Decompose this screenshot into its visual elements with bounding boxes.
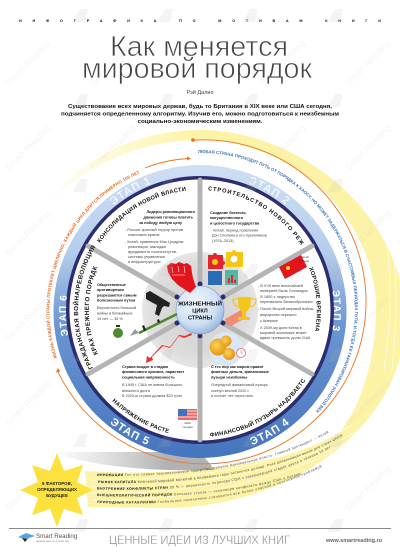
hub	[176, 286, 224, 334]
text: stage 6: Вероятность большой	[97, 306, 136, 310]
section headings: НАПРЯЖЕНИЕ РАСТЕТ	[112, 398, 170, 433]
watermark: Smart Reading	[343, 208, 393, 258]
text: stage 1: системы управления	[128, 255, 165, 259]
watermark: Smart Reading	[3, 208, 53, 258]
icon: red fist	[167, 262, 196, 293]
text: stage 2	[210, 211, 267, 243]
text: stage 4	[211, 365, 269, 398]
text: stage 2: могущественного	[210, 216, 244, 220]
section headings: ГРАЖДАНСКАЯ ВОЙНА/РЕВОЛЮЦИЯ,	[72, 245, 96, 370]
watermark: Smart Reading	[3, 293, 53, 343]
intro text: социально-экономическим изменениям.	[138, 119, 263, 125]
arc caption: orange: ЖИЗНЬ КАЖДОЙ СТРАНЫ ПРОТЕКАЕТ ЦИКЛИЧНО, КАЖДЫЙ ЦИКЛ ДЛИТСЯ ПРИМЕРНО 100 ЛЕТ	[46, 170, 139, 359]
text: stage 3: мировой экономике может	[260, 331, 307, 335]
watermark: Smart Reading	[343, 123, 393, 173]
icon: coins and clock	[209, 332, 246, 366]
star with factors title: 5 ФАКТОРОВ,	[42, 481, 72, 486]
author: Рэй Далио	[186, 89, 214, 96]
wheel	[54, 165, 346, 458]
text: stage 6: противоречия	[97, 288, 124, 292]
text: stage 6: войны в ближайшие	[97, 312, 133, 316]
icon: USA flag: сегодня	[182, 425, 193, 429]
watermark: Smart Reading	[258, 38, 308, 88]
outer blue ring	[54, 165, 346, 458]
title: мировой порядок	[82, 53, 312, 85]
text: stage 1: за победу любую цену	[139, 221, 183, 225]
text: stage 2: Создание богатого,	[210, 211, 247, 215]
text: stage 1: Лидеры революционного	[147, 210, 196, 214]
text: stage 2: - Китай: период правления	[211, 228, 258, 232]
text: stage 3: вдвое превысить долю США	[260, 336, 311, 340]
factors list: ВНЕШНЕПОЛИТИЧЕСКИЙ ПОРЯДОК Большая угроза — эскалация конфликта между США и Китаем	[97, 473, 301, 497]
text: stage 1: - Китай: правление Мао Цзэдуна:	[125, 240, 184, 244]
text: stage 5: социальная напряженность	[122, 376, 175, 380]
text: stage 4: Очередной финансовый пузырь	[211, 383, 268, 387]
footer url: www.smartreading.ru	[325, 538, 382, 544]
text: stage 5: финансового кризиса, нарастает	[122, 370, 184, 374]
text: stage 2: (1976–2013)	[212, 239, 234, 243]
watermark: Smart Reading	[3, 463, 53, 513]
text: stage 3: - К 2049-му доля Китая в	[258, 326, 302, 330]
stage labels: ЭТАП 2	[249, 177, 290, 204]
icon: trophy and hand	[225, 297, 256, 326]
top label: ИНФОГРАФИКА ПО МОТИВАМ КНИГИ	[19, 19, 381, 23]
text: stage 3: - В XVII веке величайшей	[258, 284, 303, 288]
stage labels	[59, 177, 341, 444]
intro text: подчиняется определенному алгоритму. Изучив его, можно подготовиться к неизбежным	[61, 110, 339, 118]
text: stage 6: Общественные	[97, 283, 126, 287]
text: stage 2: Дэн Сяопина и его преемников	[212, 234, 267, 238]
factors list	[97, 430, 342, 504]
watermark: Smart Reading	[258, 123, 308, 173]
section headings: ФИНАНСОВЫЙ ПУЗЫРЬ НАДУВАЕТСЯ	[210, 378, 305, 436]
text: stage 5: В 1945 г. США не имели большого	[122, 383, 182, 387]
stage labels: ЭТАП 3	[332, 290, 341, 331]
footer slogan: ЦЕННЫЕ ИДЕИ ИЗ ЛУЧШИХ КНИГ	[109, 533, 290, 547]
arc caption: blue: ЛЮБАЯ СТРАНА ПРОХОДИТ ПУТЬ ОТ ПОРЯДКА К ХАОСУ, НО МОЖЕТ ЗАДЕРЖАТЬСЯ В СЧАСТЛИВЫХ ПЕРИОДАХ ПУТИ, И ТОГДА ЕЕ ГАРАНТИРОВАН ЗОЛОТОЙ ВЕК	[198, 150, 358, 413]
footer	[9, 528, 391, 547]
title	[82, 31, 312, 85]
star with factors title: ОПРЕДЕЛЯЮЩИХ	[37, 487, 77, 492]
text: stage 1: классовых врагов	[128, 233, 159, 237]
text: stage 3: империей была Голландия	[260, 289, 308, 293]
text: stage 1: революция, закладка	[128, 245, 167, 249]
footer logo: Ценные идеи из лучших книг	[36, 540, 70, 543]
factors list: ВНУТРЕННИЕ КОНФЛИКТЫ СТРАН 30 % — вероятность перехода США к завершающей стадии цикла в течение 10 лет	[97, 446, 330, 490]
text: stage 5: В 2020-м страна должна $23 трлн	[122, 394, 182, 398]
text: stage 4: С тех пор как миром правят	[211, 365, 264, 369]
icon: China flag: Китай	[301, 255, 309, 259]
text: stage 5: внешнего долга	[122, 389, 151, 393]
hub: ЦИКЛ	[192, 308, 208, 314]
title: Как меняется	[110, 31, 288, 63]
text: stage 4: лопнул весной 2020 г.	[211, 389, 249, 393]
section headings: КОНСОЛИДАЦИЯ НОВОЙ ВЛАСТИ	[97, 186, 186, 243]
hub: ЖИЗНЕННЫЙ	[177, 300, 222, 308]
text: stage 3: к Америке	[260, 319, 278, 323]
text: stage 5	[122, 365, 184, 398]
star with factors title	[20, 453, 93, 527]
spokes	[88, 180, 312, 440]
footer logo: Smart Reading	[36, 533, 78, 540]
watermark: Smart Reading	[343, 378, 393, 428]
wheel shadow	[50, 452, 215, 470]
intro text	[61, 103, 339, 125]
text: stage 4: пузыри неизбежны	[211, 376, 247, 380]
footer logo	[18, 533, 78, 543]
text: stage 3: - После Второй мировой войны	[258, 307, 314, 311]
icon: USA flag	[178, 409, 197, 429]
hub: СТРАНЫ	[188, 316, 213, 322]
watermark: Smart Reading	[343, 463, 393, 513]
text: stage 4: и лопнет лет через пять	[211, 394, 253, 398]
hub joints	[174, 282, 226, 338]
yellow swoosh	[38, 130, 400, 508]
text: stage 3: - В 1800-х лидерство	[258, 295, 295, 299]
icon: rocket launcher	[130, 314, 177, 336]
watermark: Smart Reading	[343, 293, 393, 343]
text: stage 2: и целостного государства	[210, 222, 260, 226]
navy ring	[66, 176, 334, 444]
watermark: Smart Reading	[343, 38, 393, 88]
stage labels: ЭТАП 4	[250, 418, 289, 444]
text: stage 3: перехватила Великобритания	[260, 300, 313, 304]
stage labels: ЭТАП 1	[110, 178, 151, 204]
icon: USA flag: США	[184, 421, 191, 425]
intro text: Существование всех мировых держав, будь то Британия в XIX веке или США сегодня,	[68, 103, 332, 110]
section headings	[72, 186, 321, 436]
watermark: Smart Reading	[88, 38, 138, 88]
text: stage 3	[258, 284, 314, 340]
text: stage 1: движения готовы платить	[144, 216, 194, 220]
icon: falling red arrow	[146, 333, 192, 363]
section headings: СТРОИТЕЛЬСТВО НОВОГО РЕЖИМА	[208, 186, 304, 246]
text: stage 6: болезненным путем	[97, 298, 135, 302]
text: stage 4: фиатные деньги, финансовые	[211, 370, 269, 374]
icon: China flag: сегодня	[299, 259, 310, 263]
star with factors title: БУДУЩЕЕ	[46, 493, 68, 498]
text: stage 1: фундамента госинститутов,	[128, 250, 177, 254]
stage labels: ЭТАП 6	[59, 296, 68, 336]
text: stage 1	[125, 210, 196, 264]
stage labels: ЭТАП 5	[110, 418, 150, 444]
watermark: Smart Reading	[3, 123, 53, 173]
icon: puzzle pieces	[208, 250, 243, 285]
icon: pistol	[146, 291, 170, 316]
text: stage 6: 10 лет — 35 %	[97, 317, 123, 321]
text: stage 5: Страна входит в стадию	[122, 365, 169, 369]
grey inner disc	[142, 252, 258, 368]
icon: grenade	[113, 325, 123, 338]
text: stage 3: имущество перешло	[260, 313, 296, 317]
text: stage 1: и инфраструктуры	[128, 260, 161, 264]
text: stage 6	[97, 283, 137, 321]
white disc	[70, 180, 330, 440]
section headings: ХОРОШИЕ ВРЕМЕНА	[309, 266, 321, 331]
watermark: Smart Reading	[88, 123, 138, 173]
watermark: Smart Reading	[3, 378, 53, 428]
icon: China flag	[279, 255, 310, 279]
watermark: Smart Reading	[3, 38, 53, 88]
factors list: РЫНОК КАПИТАЛА Ключевой мировой валютой в ближайшие годы останется доллар. Риск девальвации высок для стран цикла	[98, 434, 342, 484]
factors list: ИННОВАЦИИ Тот, кто совмет технологическое лидерство, получит максимальную власть. Главный претендент — Китай	[97, 430, 328, 477]
orange cycle arrow	[56, 138, 366, 464]
factors list: ПРИРОДНЫЕ КАТАКЛИЗМЫ Глобальное потепление становится все более опасной и неотложной проблемой	[97, 464, 322, 504]
text: stage 6: разрешаются самым	[97, 294, 137, 298]
text: stage 1: - Россия: красный террор против	[125, 228, 183, 232]
